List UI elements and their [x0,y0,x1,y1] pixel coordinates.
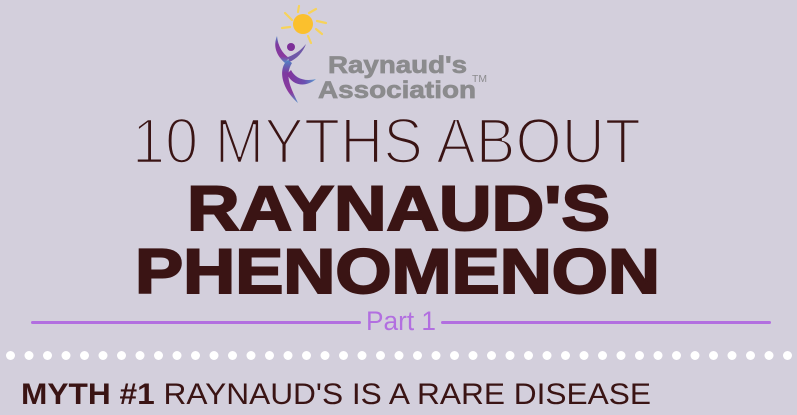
divider left [31,321,361,324]
myth 1 statement: MYTH #1 RAYNAUD'S IS A RARE DISEASE [21,378,651,411]
logo: Raynaud's Association [275,6,487,104]
heading: Raynaud's: RAYNAUD'S [187,174,610,244]
icon: figure [275,36,316,103]
heading: Phenomenon: PHENOMENON [135,237,660,307]
divider right [441,321,771,324]
logo text [318,52,476,104]
part label: Part 1 [366,306,436,336]
heading: 10 myths about: 10 MYTHS ABOUT [132,105,641,177]
trademark: TM [472,74,487,85]
dotted row [6,351,792,360]
logo text: Raynaud's [328,52,467,79]
logo text: Association [318,77,476,104]
icon: sun [282,6,326,43]
